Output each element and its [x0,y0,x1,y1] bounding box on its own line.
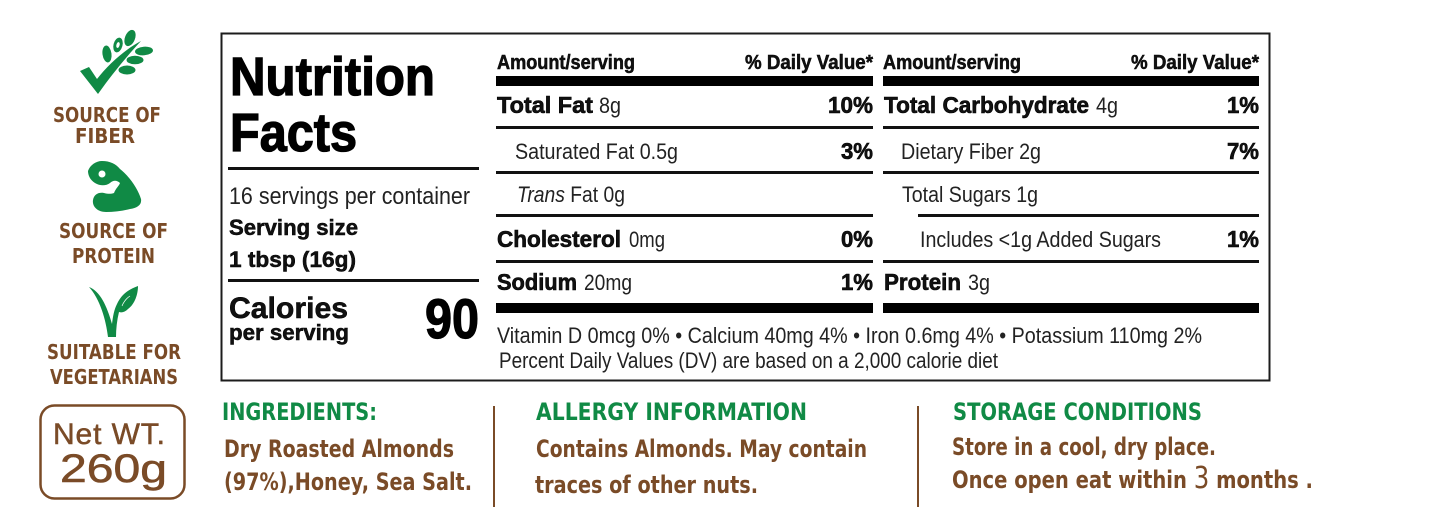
table: left nutrient column: Total Fat [497,92,593,118]
table: right nutrient column: Protein [884,269,961,295]
table: left nutrient column: 10% [828,92,873,118]
table: right nutrient column: Total Carbohydrate [884,92,1089,118]
calories [229,287,479,350]
badge: source of fiber: FIBER [75,124,135,148]
vitamins and footnote: Vitamin D 0mcg 0% • Calcium 40mg 4% • Iron 0.6mg 4% • Potassium 110mg 2% [497,323,1202,348]
vitamins and footnote: Percent Daily Values (DV) are based on a 2,000 calorie diet [499,348,998,373]
table: left nutrient column: Sodium [497,269,577,295]
net weight badge [40,406,184,498]
badge: suitable for vegetarians: SUITABLE FOR [47,340,181,364]
icon: flexed arm [88,161,141,212]
badge: suitable for vegetarians: VEGETARIANS [50,365,178,389]
table: left nutrient column: 20mg [584,270,632,295]
table: right nutrient column: Amount/serving [883,52,1021,74]
table: right nutrient column [883,52,1259,313]
calories: 90 [425,287,479,350]
badge: source of fiber: SOURCE OF [53,103,161,127]
icon: wheat check mark [80,28,153,94]
table: left nutrient column: 3% [841,138,873,164]
text block: ingredients: (97%),Honey, Sea Salt. [224,468,472,496]
badge: source of protein: SOURCE OF [59,219,168,243]
table: right nutrient column: % Daily Value* [1131,52,1259,74]
table: right nutrient column: 1% [1227,92,1259,118]
text block: storage conditions [952,398,1313,496]
table: left nutrient column: 1% [841,269,873,295]
text block: ingredients [222,398,472,496]
table: right nutrient column: 4g [1096,93,1118,118]
table: right nutrient column: 3g [968,270,990,295]
table: left nutrient column: Cholesterol [497,226,621,252]
text block: allergy information: traces of other nuts. [535,471,758,499]
serving information: 1 tbsp (16g) [229,247,356,272]
badge: source of protein [59,161,168,268]
panel: nutrition facts label [222,34,1270,380]
table: right nutrient column: 1% [1227,226,1259,252]
vitamins and footnote [497,323,1202,373]
table: left nutrient column: Trans Fat 0g [517,182,625,207]
text block: allergy information: Contains Almonds. May contain [536,435,867,463]
table: right nutrient column: Dietary Fiber 2g [901,139,1041,164]
text block: storage conditions: Once open eat within 3 months . [952,461,1313,496]
table: left nutrient column: % Daily Value* [745,52,873,74]
serving information: 16 servings per container [229,183,470,210]
badge: source of fiber [53,28,161,148]
heading: nutrition facts [230,47,435,163]
heading: nutrition facts: Facts [230,103,357,163]
text block: allergy information: ALLERGY INFORMATION [536,398,807,426]
text block: allergy information [535,398,867,499]
text block: ingredients: Dry Roasted Almonds [224,435,454,463]
calories: Calories [229,292,348,325]
table: left nutrient column: 8g [599,93,621,118]
table: left nutrient column: 0% [841,226,873,252]
heading: nutrition facts: Nutrition [230,47,435,107]
table: left nutrient column: Amount/serving [497,52,635,74]
table: left nutrient column [496,52,873,313]
serving information: Serving size [229,215,358,240]
table: left nutrient column: 0mg [629,227,665,252]
badge: suitable for vegetarians [47,286,181,389]
calories: per serving [229,320,349,345]
table: right nutrient column: 7% [1227,138,1259,164]
text block: storage conditions: STORAGE CONDITIONS [953,398,1202,426]
net weight badge: Net WT. [53,418,165,451]
serving information [229,183,470,272]
text block: ingredients: INGREDIENTS: [222,398,377,426]
table: right nutrient column: Includes <1g Added Sugars [920,227,1161,252]
icon: V leaf [89,286,138,337]
text block: storage conditions: Store in a cool, dry place. [952,433,1216,461]
badge: source of protein: PROTEIN [72,244,155,268]
table: left nutrient column: Saturated Fat 0.5g [515,139,678,164]
net weight badge: 260g [60,447,167,491]
table: right nutrient column: Total Sugars 1g [902,182,1038,207]
